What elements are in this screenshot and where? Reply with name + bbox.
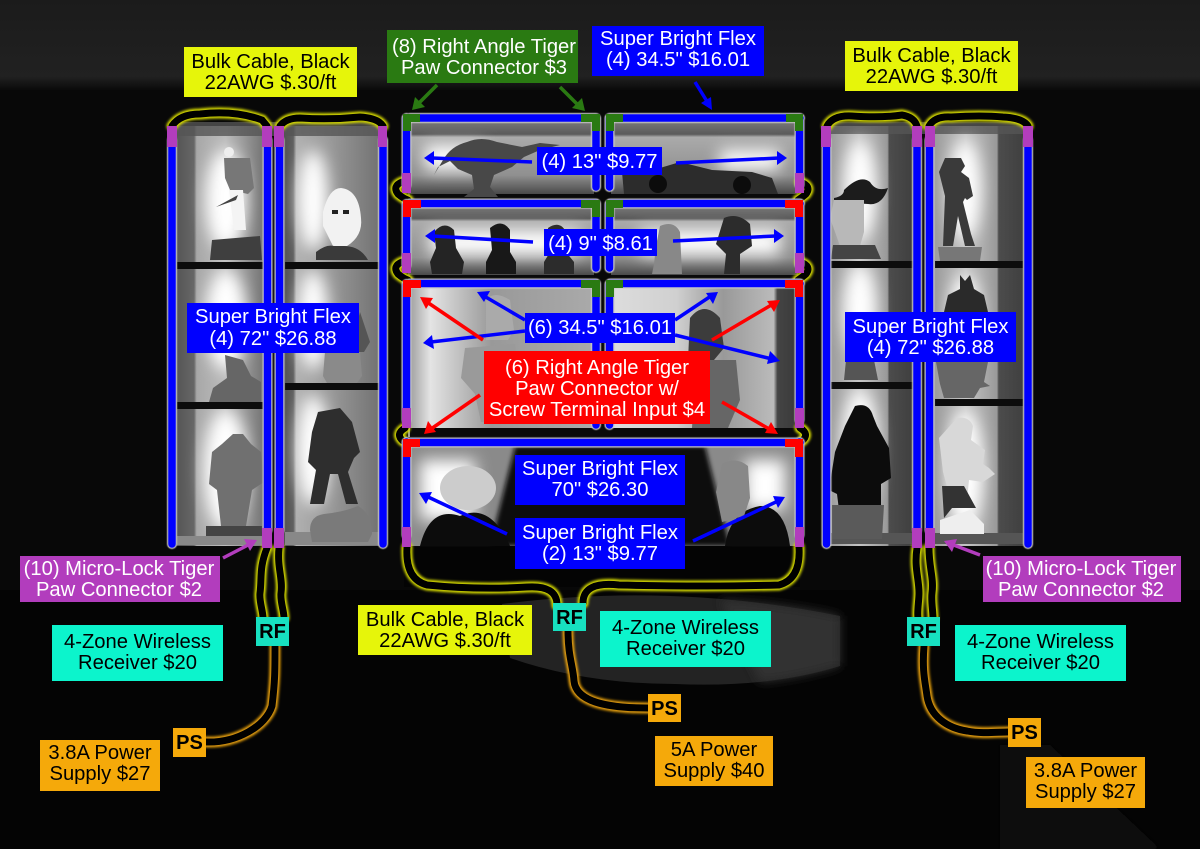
label: micro-lock connector left (20, 556, 220, 602)
right angle Tiger Paw connectors: green (403, 114, 803, 297)
arrows: blue pointers (419, 82, 787, 541)
PS power supply tag right: PS (1011, 722, 1038, 744)
label: right angle tiger paw connector green (387, 30, 578, 83)
label: bulk cable top right: 22AWG $.30/ft (866, 66, 998, 88)
label: flex 13 inch bottom (515, 518, 685, 569)
label: screw terminal connector red: (6) Right Angle Tiger (505, 357, 689, 379)
label: flex 70 inch: Super Bright Flex (522, 458, 678, 480)
Micro-Lock Tiger Paw connectors: purple (167, 126, 1033, 548)
PS power supply tag centre (648, 694, 681, 722)
label: power supply right: Supply $27 (1035, 781, 1136, 803)
label: flex 9 inch second row: (4) 9" $8.61 (548, 233, 653, 255)
label: wireless receiver right (955, 625, 1126, 681)
Super Bright Flex LED strips: blue (172, 118, 1028, 544)
label: flex 72 inch left: (4) 72" $26.88 (209, 328, 337, 350)
arrows: green pointers (412, 85, 585, 111)
label: wireless receiver centre: Receiver $20 (626, 638, 745, 660)
label: right angle tiger paw connector green: (8) Right Angle Tiger (392, 36, 576, 58)
label: right angle tiger paw connector green: Paw Connector $3 (401, 57, 567, 79)
RF receiver tag centre: RF (556, 607, 583, 629)
label: wireless receiver right: 4-Zone Wireless (967, 631, 1114, 653)
label: power supply left: Supply $27 (49, 763, 151, 785)
label: flex 72 inch left (187, 303, 359, 353)
label: power supply centre (655, 736, 773, 786)
label: flex 72 inch right: (4) 72" $26.88 (867, 337, 994, 359)
label: bulk cable top right: Bulk Cable, Black (852, 45, 1012, 67)
label: bulk cable top left (184, 47, 357, 97)
RF receiver tag left: RF (259, 621, 286, 643)
label: flex 13 inch bottom: Super Bright Flex (522, 522, 678, 544)
label: wireless receiver left: Receiver $20 (78, 652, 197, 674)
label: power supply right: 3.8A Power (1034, 760, 1137, 782)
RF receiver tag right: RF (910, 621, 937, 643)
cabinet photo: centre shelves (404, 122, 800, 587)
PS power supply tag right (1008, 718, 1041, 747)
label: flex 70 inch (515, 455, 685, 505)
Super Bright Flex LED strips: white glow (172, 118, 1028, 544)
PS power supply tag left (173, 728, 206, 757)
RF receiver tag left (256, 617, 289, 646)
label: bulk cable top left: 22AWG $.30/ft (205, 72, 337, 94)
PS power supply tag left: PS (176, 732, 203, 754)
label: power supply centre: 5A Power (671, 739, 757, 761)
collectible figures: left column (206, 147, 372, 542)
label: screw terminal connector red: Paw Connector w/ (515, 378, 679, 400)
arrows: purple pointers (223, 539, 980, 558)
label: wireless receiver right: Receiver $20 (981, 652, 1100, 674)
label: bulk cable bottom (358, 605, 532, 655)
label: micro-lock connector left: (10) Micro-Lock Tiger (24, 558, 215, 580)
label: screw terminal connector red (484, 351, 710, 424)
label: flex 70 inch: 70" $26.30 (552, 479, 648, 501)
label: power supply left: 3.8A Power (48, 742, 152, 764)
label: micro-lock connector right: Paw Connector $2 (998, 579, 1164, 601)
label: flex 34.5 inch third row: (6) 34.5" $16.01 (528, 317, 672, 339)
label: screw terminal connector red: Screw Terminal Input $4 (489, 399, 705, 421)
label: bulk cable top right (845, 41, 1018, 91)
shelf objects: dinosaur, car, busts, helmets (430, 139, 778, 522)
label: super bright flex top: (4) 34.5" $16.01 (606, 49, 750, 71)
label: super bright flex top (592, 26, 764, 76)
label: micro-lock connector right (983, 556, 1181, 602)
label: power supply right (1026, 757, 1145, 808)
label: wireless receiver centre (600, 611, 771, 667)
label: flex 72 inch right: Super Bright Flex (853, 316, 1008, 338)
label: flex 13 inch top row: (4) 13" $9.77 (541, 151, 658, 173)
label: bulk cable bottom: 22AWG $.30/ft (379, 630, 511, 652)
bulk cable runs: black wire (172, 113, 1028, 742)
label: flex 72 inch right (845, 312, 1016, 362)
label: micro-lock connector left: Paw Connector $2 (36, 579, 202, 601)
label: wireless receiver left (52, 625, 223, 681)
right angle connectors with screw terminal: red (403, 200, 803, 457)
label: power supply left (40, 740, 160, 791)
label: flex 13 inch bottom: (2) 13" $9.77 (542, 543, 658, 565)
label: wireless receiver left: 4-Zone Wireless (64, 631, 211, 653)
collectible figures: right column (829, 158, 995, 539)
label: flex 72 inch left: Super Bright Flex (195, 306, 351, 328)
RF receiver tag centre (553, 603, 586, 631)
label: wireless receiver centre: 4-Zone Wireless (612, 617, 759, 639)
label: super bright flex top: Super Bright Flex (600, 28, 756, 50)
label: bulk cable top left: Bulk Cable, Black (191, 51, 351, 73)
cabinet photo: left tall columns (176, 122, 382, 546)
label: micro-lock connector right: (10) Micro-Lock Tiger (986, 558, 1177, 580)
RF receiver tag right (907, 617, 940, 646)
arrows: red pointers (420, 297, 780, 434)
cabinet photo: right tall columns (829, 122, 1027, 546)
label: power supply centre: Supply $40 (663, 760, 765, 782)
cable glow: yellow and amber halo (172, 113, 1028, 742)
PS power supply tag centre: PS (651, 698, 678, 720)
label: bulk cable bottom: Bulk Cable, Black (366, 609, 525, 631)
